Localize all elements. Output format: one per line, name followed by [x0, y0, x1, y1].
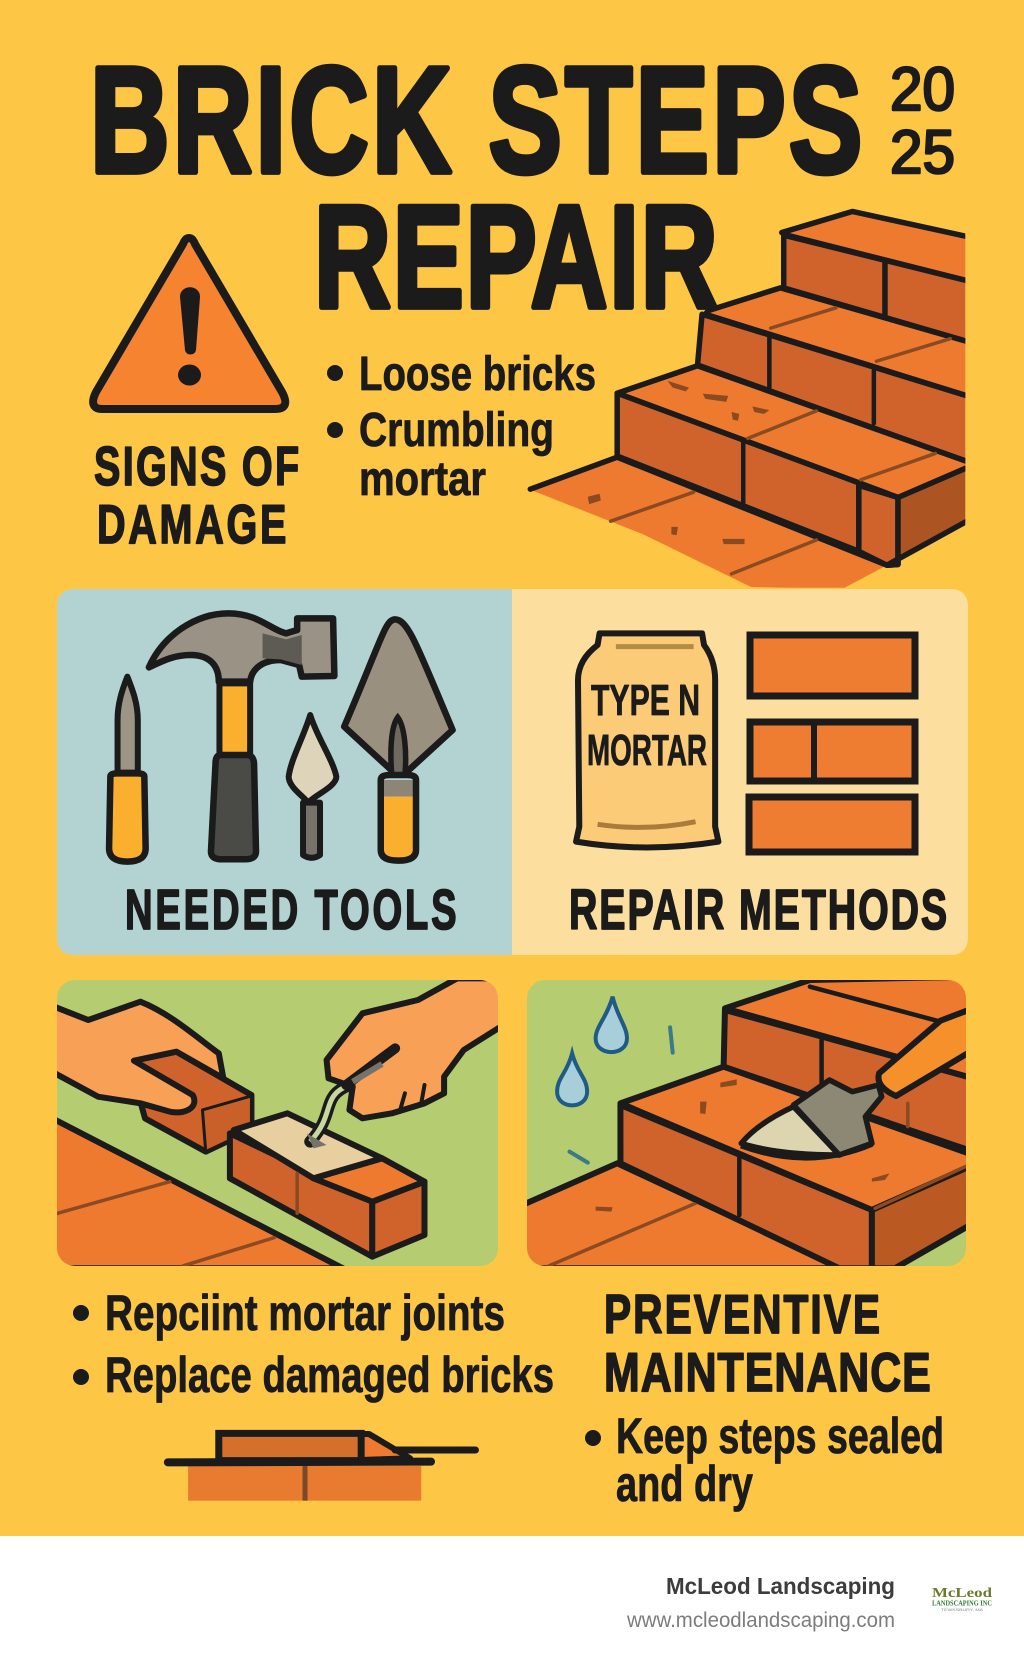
list: repair methods: [73, 1285, 554, 1403]
heading: preventive maintenance: MAINTENANCE: [604, 1342, 931, 1403]
panel: needed tools: [57, 589, 512, 955]
list: signs of damage: Loose bricks: [359, 348, 596, 401]
list: repair methods: Replace damaged bricks: [105, 1347, 554, 1403]
icon: company logo: TEWKSBURY, MA: [941, 1607, 983, 1612]
icon: company logo: McLeod: [932, 1586, 992, 1601]
footer: company name and website: McLeod Landscaping: [666, 1573, 895, 1599]
heading: repair methods: REPAIR METHODS: [569, 879, 947, 942]
title: 20: [890, 55, 955, 123]
list: signs of damage: mortar: [359, 453, 486, 506]
heading: signs of damage: SIGNS OF: [94, 437, 299, 498]
icon: hand tools: [109, 613, 453, 862]
panel: maintenance illustration: [522, 977, 973, 1268]
heading: needed tools: NEEDED TOOLS: [125, 878, 457, 942]
icon: mortar bag: TYPE N: [591, 676, 700, 725]
heading: signs of damage: DAMAGE: [97, 495, 286, 556]
title: REPAIR: [314, 176, 718, 339]
title: 25: [890, 118, 955, 186]
illustration: brick staircase: [529, 211, 973, 589]
list: preventive maintenance: and dry: [616, 1456, 753, 1512]
heading: preventive maintenance: PREVENTIVE: [604, 1284, 880, 1346]
list: signs of damage: Crumbling: [359, 404, 554, 457]
title: [90, 36, 955, 339]
list: repair methods: Repciint mortar joints: [105, 1285, 505, 1341]
heading: preventive maintenance: [604, 1284, 931, 1403]
footer: company name and website: [626, 1573, 895, 1632]
icon: company logo: LANDSCAPING INC: [932, 1598, 992, 1608]
panel: repointing illustration: [46, 978, 506, 1268]
title: BRICK STEPS: [90, 36, 862, 205]
icon: mortar bag: MORTAR: [587, 726, 707, 775]
footer band: [0, 1536, 1024, 1666]
footer: company name and website: www.mcleodlandscaping.com: [626, 1609, 895, 1632]
list: preventive maintenance: [585, 1408, 944, 1512]
icon: brick courses: [749, 635, 915, 852]
panel: repair methods: [512, 589, 968, 955]
list: signs of damage: [327, 348, 596, 506]
heading: signs of damage: [94, 437, 299, 556]
icon: warning triangle: [93, 238, 285, 409]
icon: mortar bag: [576, 633, 718, 847]
icon: company logo: [932, 1586, 992, 1612]
icon: water drops: [557, 997, 673, 1163]
icon: brick and trowel: [168, 1433, 475, 1501]
